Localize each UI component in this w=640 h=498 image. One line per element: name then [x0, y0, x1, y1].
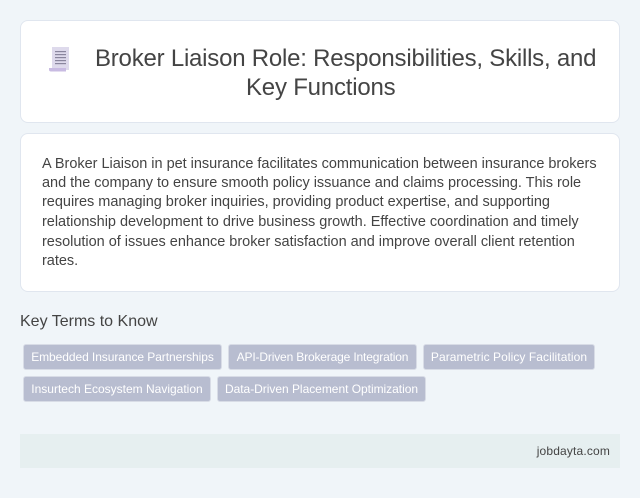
description text: requires managing broker inquiries, providing product expertise, and supporting [42, 194, 550, 210]
footer source: jobdayta.com [537, 444, 610, 458]
tag [228, 344, 417, 370]
panel: description card [20, 133, 620, 292]
tag [23, 344, 222, 370]
description text: rates. [42, 253, 78, 269]
tag [23, 376, 211, 402]
footer bar [20, 434, 620, 468]
tag [423, 344, 595, 370]
title: Key Functions [246, 74, 395, 101]
description text: and the company to ensure smooth policy issuance and claims processing. This role [42, 175, 581, 191]
tag list [23, 344, 595, 402]
description text [42, 156, 597, 269]
tag: Insurtech Ecosystem Navigation [31, 382, 203, 396]
title: Broker Liaison Role: Responsibilities, Skills, and [95, 45, 596, 72]
icon: document scroll [49, 47, 69, 72]
tag: Parametric Policy Facilitation [431, 350, 587, 364]
description text: resolution of issues enhance broker satisfaction and improve overall client retention [42, 234, 575, 250]
heading: key terms: Key Terms to Know [20, 313, 158, 330]
description text: A Broker Liaison in pet insurance facilitates communication between insurance brokers [42, 156, 597, 172]
tag: Data-Driven Placement Optimization [225, 382, 418, 396]
tag: Embedded Insurance Partnerships [31, 350, 214, 364]
panel: title card [20, 20, 620, 123]
title [95, 45, 596, 101]
tag [217, 376, 426, 402]
tag: API-Driven Brokerage Integration [237, 350, 408, 364]
description text: relationship development to drive business growth. Effective coordination and timely [42, 214, 579, 230]
